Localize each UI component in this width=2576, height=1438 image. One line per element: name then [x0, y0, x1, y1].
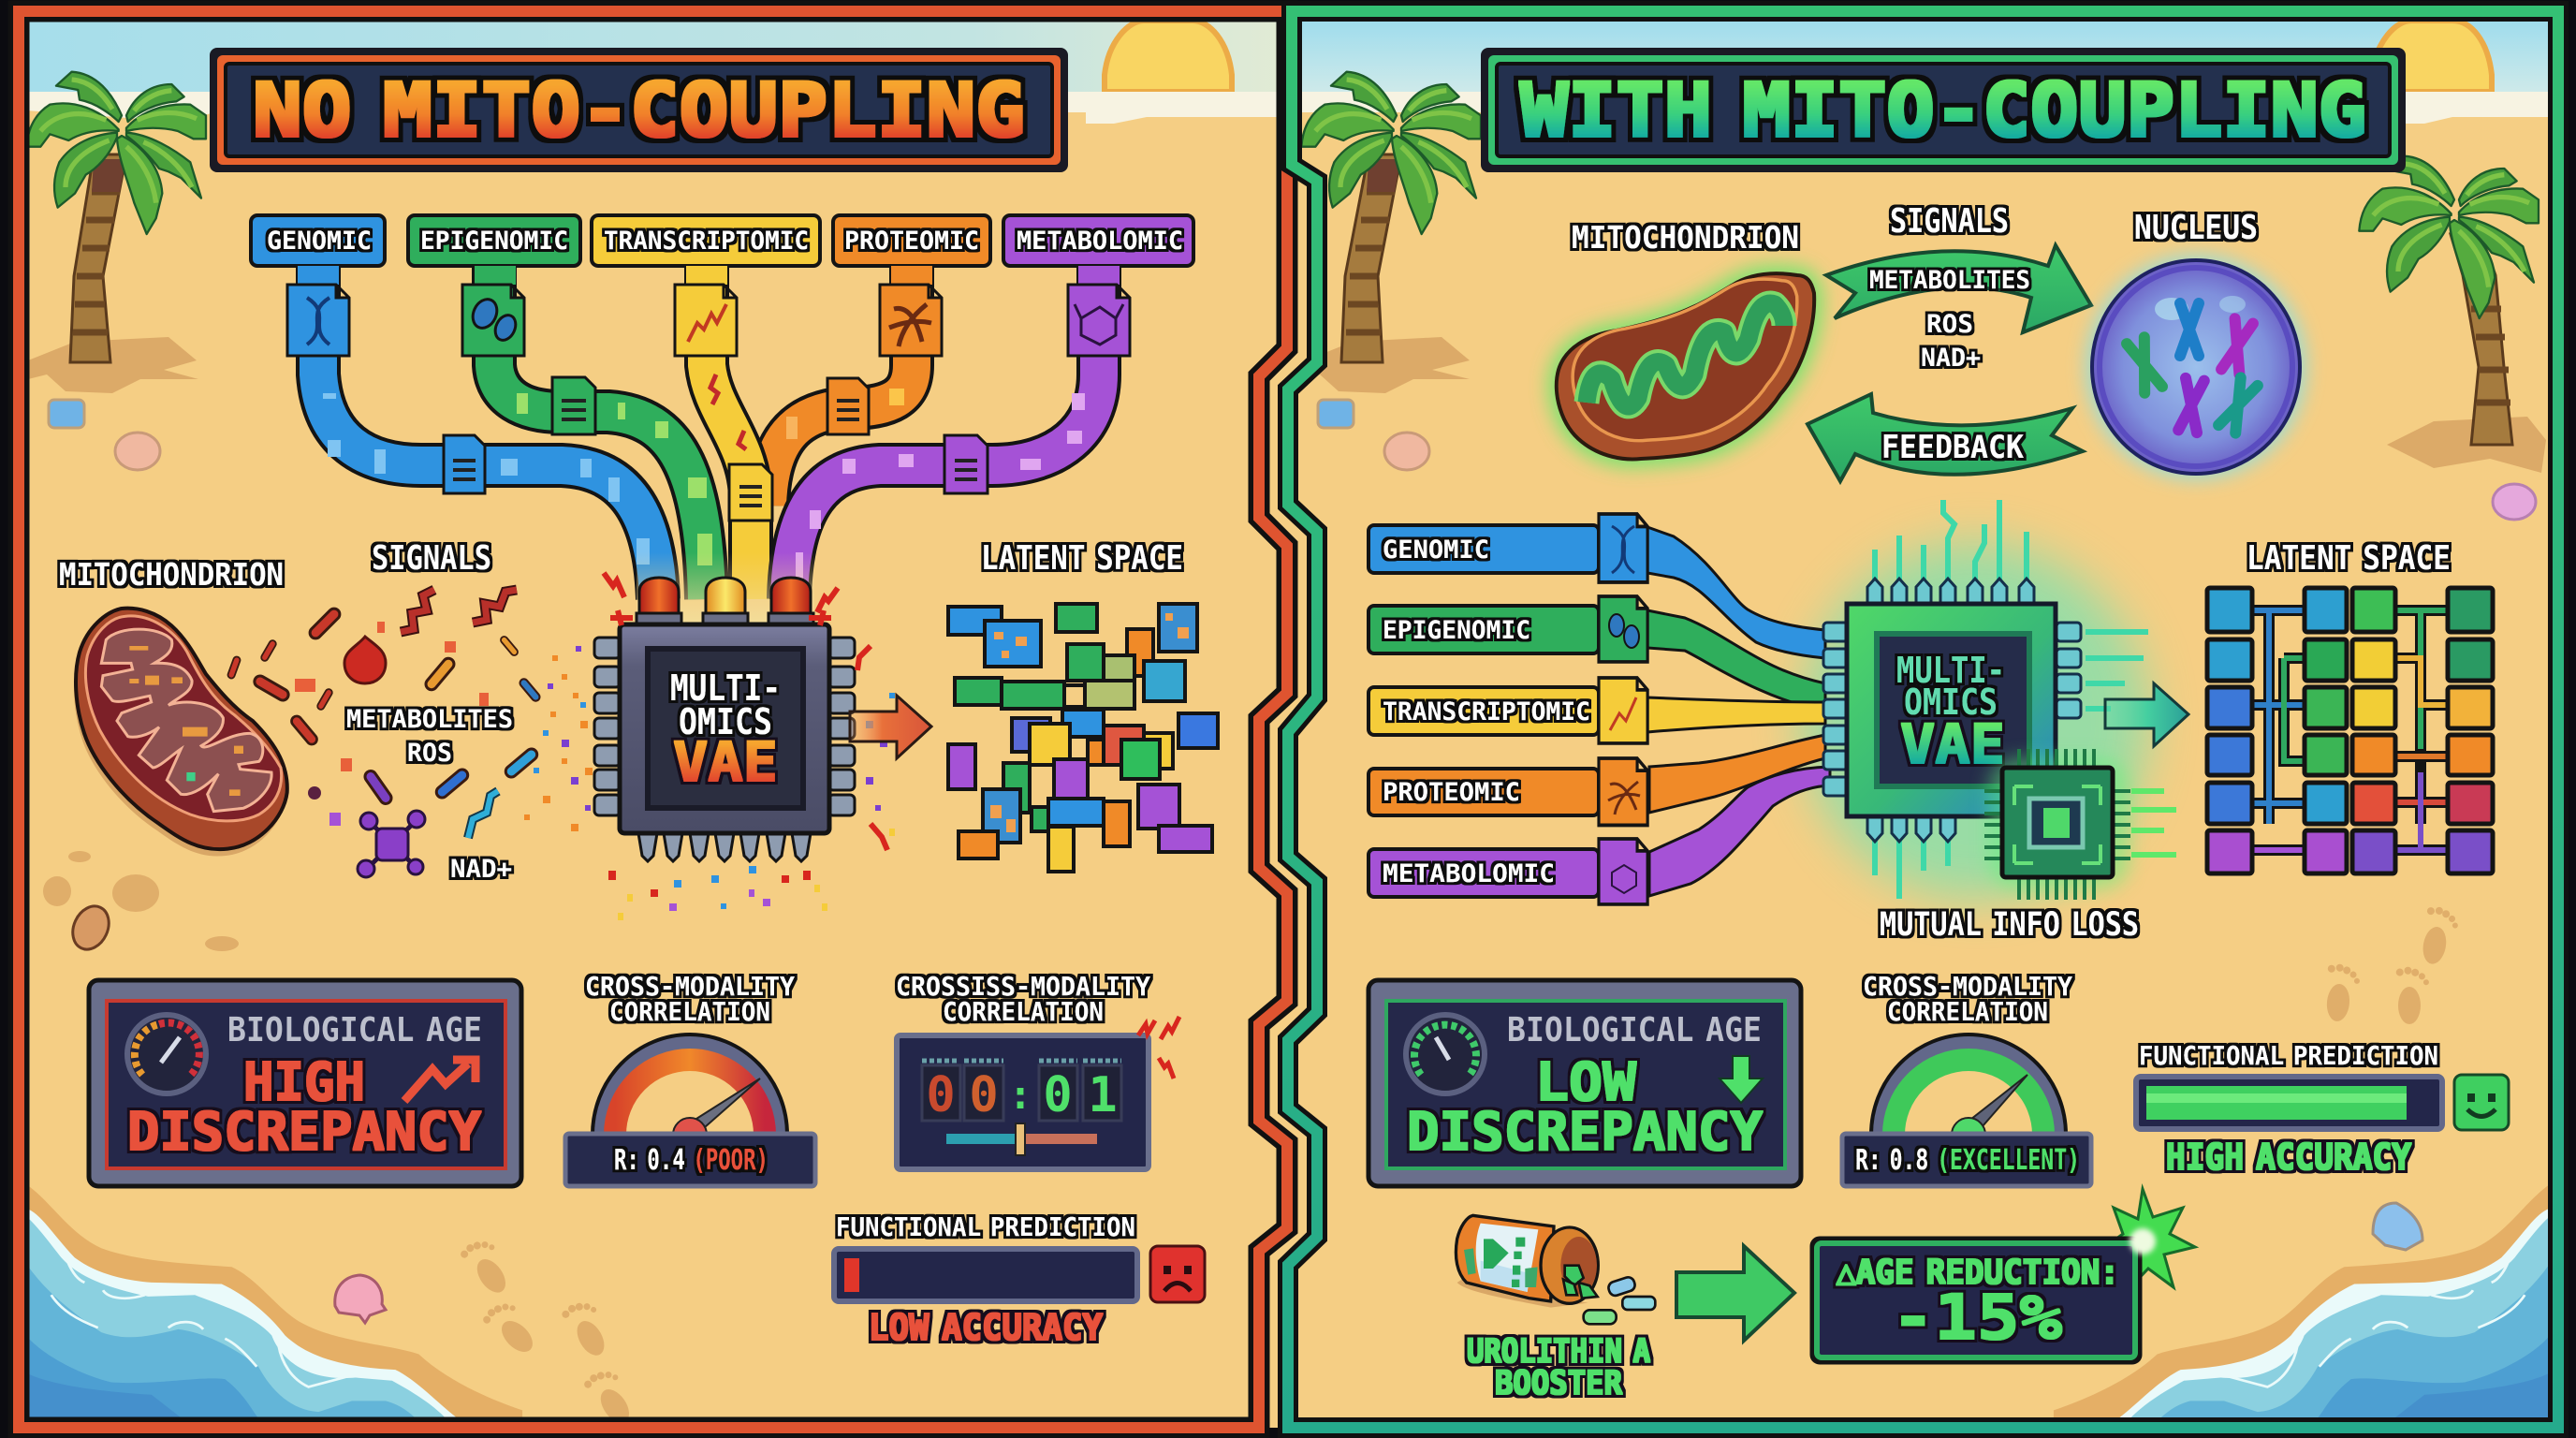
burst core	[2130, 1228, 2156, 1255]
label: genomic: GENOMIC	[267, 227, 372, 256]
row: metabolomic: METABOLOMIC	[1383, 859, 1555, 888]
palm tree	[26, 72, 206, 362]
footprints right	[2311, 902, 2465, 1030]
footprints	[459, 1236, 637, 1433]
right heading: signals: SIGNALS	[1890, 202, 2009, 241]
right heading: nucleus: NUCLEUS	[2134, 209, 2258, 247]
title: with mito-coupling	[1481, 48, 2406, 172]
cross-modality correlation gauge (left)	[565, 971, 815, 1186]
cross-modality correlation gauge (left): R: 0.4 (POOR)	[614, 1144, 768, 1177]
signal labels left	[346, 705, 513, 884]
cross-modality correlation gauge (right): CORRELATION	[1887, 996, 2048, 1027]
chip screen	[1877, 634, 2029, 786]
crossiss-modality correlation timer: 1	[1088, 1067, 1118, 1123]
feedback label: FEEDBACK	[1881, 429, 2024, 466]
signal labels left: METABOLITES	[346, 705, 513, 734]
label: mutual info loss: MUTUAL INFO LOSS	[1880, 906, 2139, 944]
crossiss-modality correlation timer: 0	[969, 1067, 999, 1123]
cross-modality correlation gauge (left): CORRELATION	[609, 996, 770, 1027]
chip glow	[1989, 758, 2130, 889]
chip text: VAE	[673, 730, 778, 794]
signals labels right: ROS	[1926, 310, 1973, 339]
signal labels left: NAD+	[450, 855, 512, 884]
functional prediction high accuracy	[2136, 1040, 2509, 1178]
panel: biological age low discrepancy: DISCREPANCY	[1407, 1102, 1763, 1163]
heading: latent space right: LATENT SPACE	[2247, 539, 2451, 578]
row: transcriptomic	[1368, 678, 1647, 743]
chip body	[1847, 604, 2056, 816]
grid cells	[2207, 588, 2493, 873]
vae chip: coupled	[1823, 500, 2148, 899]
chip text	[1896, 650, 2005, 776]
chip glow lines	[2131, 791, 2176, 855]
pill bottle: urolithin a	[1456, 1215, 1655, 1324]
signals labels right: METABOLITES	[1869, 266, 2030, 295]
title: no mito-coupling: NO MITO-COUPLING	[253, 69, 1025, 154]
panel: biological age low discrepancy: BIOLOGICAL AGE	[1507, 1011, 1762, 1049]
pipe data flecks	[323, 374, 1085, 579]
panel: with mito-coupling scene	[1296, 21, 2551, 1418]
warning lights	[637, 578, 813, 624]
mitochondrion: damaged	[74, 609, 287, 856]
panel: age reduction	[1814, 1240, 2138, 1360]
sky right	[1296, 21, 2551, 94]
panel: biological age high discrepancy: HIGH	[243, 1052, 365, 1113]
panel: age reduction: △AGE REDUCTION:	[1837, 1254, 2119, 1292]
crossiss-modality correlation timer	[896, 971, 1179, 1169]
icon: arrow down	[1720, 1056, 1763, 1103]
icon: trend up	[404, 1060, 476, 1101]
label: transcriptomic: TRANSCRIPTOMIC	[604, 227, 809, 256]
pixel bits	[295, 622, 489, 771]
functional prediction low accuracy: LOW ACCURACY	[869, 1307, 1103, 1348]
foam horizon right	[1296, 92, 2551, 124]
stream: transcriptomic	[1647, 697, 1825, 732]
icon: histone document	[462, 285, 524, 356]
mutual info loss chip	[1984, 749, 2176, 900]
label: genomic	[251, 215, 385, 285]
row: proteomic: PROTEOMIC	[1383, 778, 1520, 807]
cross-modality correlation gauge (left): CROSS-MODALITY	[585, 971, 795, 1002]
panel: biological age high discrepancy: BIOLOGICAL AGE	[227, 1011, 482, 1049]
latent space: organised grid	[2207, 588, 2493, 873]
arrow: to latent space (left)	[850, 696, 931, 758]
palm one	[1301, 72, 1481, 362]
label: urolithin a booster: BOOSTER	[1495, 1365, 1623, 1402]
chip text: OMICS	[679, 701, 772, 742]
arrow: to latent space (right)	[2105, 683, 2188, 746]
gauge dial	[1880, 1043, 2057, 1135]
chip screen	[648, 649, 803, 808]
pipe: metabolomic	[789, 266, 1099, 599]
icon: rna document	[675, 285, 737, 356]
squiggles	[401, 590, 517, 632]
mitochondrion: healthy	[1557, 273, 1814, 459]
mini gauge	[1406, 1015, 1485, 1093]
heading: latent space left: LATENT SPACE	[981, 539, 1183, 578]
label: metabolomic: METABOLOMIC	[1017, 227, 1183, 256]
signal lines	[1875, 500, 2148, 899]
icon: happy face	[2454, 1075, 2509, 1130]
pipe fade into chip	[637, 552, 814, 625]
crossiss-modality correlation timer: CROSSISS-MODALITY	[896, 971, 1150, 1002]
arrow: signals	[1826, 245, 2091, 332]
right heading: mitochondrion: MITOCHONDRION	[1572, 219, 1799, 256]
cross-modality correlation gauge (right)	[1842, 971, 2091, 1186]
alarm sparks	[1138, 1017, 1179, 1078]
label: urolithin a booster: UROLITHIN A	[1467, 1333, 1650, 1371]
signals labels right: NAD+	[1921, 344, 1981, 373]
label: epigenomic: EPIGENOMIC	[420, 227, 568, 256]
chip text: OMICS	[1904, 682, 1998, 723]
gauge dial	[601, 1043, 779, 1135]
chip text: MULTI-	[670, 668, 781, 709]
pipe: genomic	[318, 266, 658, 599]
row: genomic	[1368, 514, 1647, 582]
document icons on pipes	[287, 285, 1130, 521]
row: epigenomic: EPIGENOMIC	[1383, 616, 1530, 645]
label: urolithin a booster	[1467, 1333, 1650, 1402]
label: proteomic: PROTEOMIC	[844, 227, 979, 256]
pins	[1823, 579, 2081, 842]
row: genomic: GENOMIC	[1383, 536, 1489, 565]
omics streams into coupled chip	[1647, 527, 2148, 899]
stream: genomic	[1647, 527, 1825, 658]
sparks and confetti	[604, 573, 887, 850]
glow behind chip	[1802, 543, 2148, 899]
cross-modality correlation gauge (right): CROSS-MODALITY	[1863, 971, 2072, 1002]
arrow: to age reduction	[1676, 1246, 1794, 1341]
icon: protein document	[880, 285, 942, 356]
panel: age reduction: -15%	[1892, 1282, 2062, 1354]
pipe: proteomic	[768, 266, 912, 506]
shells right	[1318, 400, 2536, 1250]
row: metabolomic	[1368, 839, 1647, 904]
squiggle cyan	[468, 791, 498, 838]
palm two	[2359, 156, 2539, 445]
stream: proteomic	[1649, 735, 1825, 813]
panel: biological age low discrepancy	[1368, 980, 1801, 1186]
shells and sand marks	[43, 400, 239, 955]
palm shadow one	[1306, 337, 1470, 393]
omics labels (left)	[251, 215, 1193, 285]
nucleus	[2086, 255, 2306, 479]
timer slider	[946, 1123, 1097, 1155]
crossiss-modality correlation timer: 0	[926, 1067, 956, 1123]
functional prediction high accuracy: FUNCTIONAL PREDICTION	[2139, 1040, 2438, 1071]
pipe: transcriptomic	[707, 266, 751, 599]
crossiss-modality correlation timer: 0	[1043, 1067, 1073, 1123]
functional prediction low accuracy: FUNCTIONAL PREDICTION	[836, 1211, 1135, 1242]
nad molecule	[358, 811, 425, 877]
mini gauge	[127, 1015, 206, 1093]
sun right	[2372, 21, 2492, 92]
functional prediction high accuracy: HIGH ACCURACY	[2166, 1137, 2411, 1178]
row: epigenomic	[1368, 596, 1647, 662]
chip text: VAE	[1900, 712, 2005, 776]
signal labels left: ROS	[407, 739, 452, 768]
vae chip: overloaded	[594, 578, 855, 861]
cross-modality correlation gauge (right): R: 0.8 (EXCELLENT)	[1855, 1144, 2080, 1177]
title: no mito-coupling	[210, 48, 1068, 172]
heading: mitochondrion left: MITOCHONDRION	[59, 556, 284, 593]
pipe: epigenomic	[494, 266, 707, 599]
metabolite blob	[344, 637, 386, 683]
icon: molecule document	[1068, 285, 1130, 356]
capsules	[227, 607, 541, 806]
crossiss-modality correlation timer: :	[1008, 1072, 1032, 1118]
chip leads	[1984, 749, 2130, 900]
crossiss-modality correlation timer: CORRELATION	[943, 996, 1104, 1027]
label: epigenomic	[408, 215, 580, 285]
latent space: scattered blocks	[948, 604, 1218, 872]
label: proteomic	[833, 215, 990, 285]
burst	[2100, 1189, 2195, 1287]
chip text	[670, 668, 781, 794]
signal molecules: scattered	[227, 590, 541, 877]
ocean	[26, 1184, 522, 1418]
icon: sad face	[1150, 1246, 1205, 1302]
chip text: MULTI-	[1896, 650, 2005, 691]
label: metabolomic	[1003, 215, 1193, 285]
palm shadow two	[2387, 417, 2546, 473]
omics labels (right)	[1368, 514, 1647, 904]
foam horizon	[26, 92, 1285, 124]
ocean right	[2054, 1184, 2550, 1418]
chip body	[2002, 768, 2113, 877]
sun	[1105, 21, 1232, 92]
row: transcriptomic: TRANSCRIPTOMIC	[1383, 697, 1590, 726]
pipes: five omics streams	[318, 266, 1099, 599]
shell pink	[335, 1275, 386, 1323]
functional prediction low accuracy	[834, 1211, 1205, 1348]
title: with mito-coupling: WITH MITO-COUPLING	[1520, 69, 2366, 154]
panel: biological age high discrepancy: DISCREPANCY	[127, 1102, 481, 1163]
small data documents	[444, 377, 988, 521]
side and bottom pins	[594, 638, 855, 861]
stream: metabolomic	[1649, 767, 1830, 896]
icon: dna document	[287, 285, 349, 356]
chip core	[2029, 799, 2083, 847]
label: transcriptomic	[592, 215, 820, 285]
palm shadow	[28, 337, 198, 393]
panel: biological age low discrepancy: LOW	[1535, 1052, 1636, 1113]
signals labels right	[1869, 266, 2030, 373]
chip body	[620, 624, 829, 833]
arrow: feedback	[1808, 394, 2083, 481]
panel: biological age high discrepancy	[89, 980, 521, 1186]
grid connectors	[2252, 610, 2448, 850]
spilled pills	[1563, 1266, 1655, 1324]
row: proteomic	[1368, 758, 1647, 825]
stream: epigenomic	[1647, 610, 1825, 712]
heading: signals left: SIGNALS	[372, 539, 491, 578]
timer digit cells	[922, 1065, 1121, 1121]
panel: no mito-coupling scene	[26, 21, 1285, 1433]
sky	[26, 21, 1285, 94]
